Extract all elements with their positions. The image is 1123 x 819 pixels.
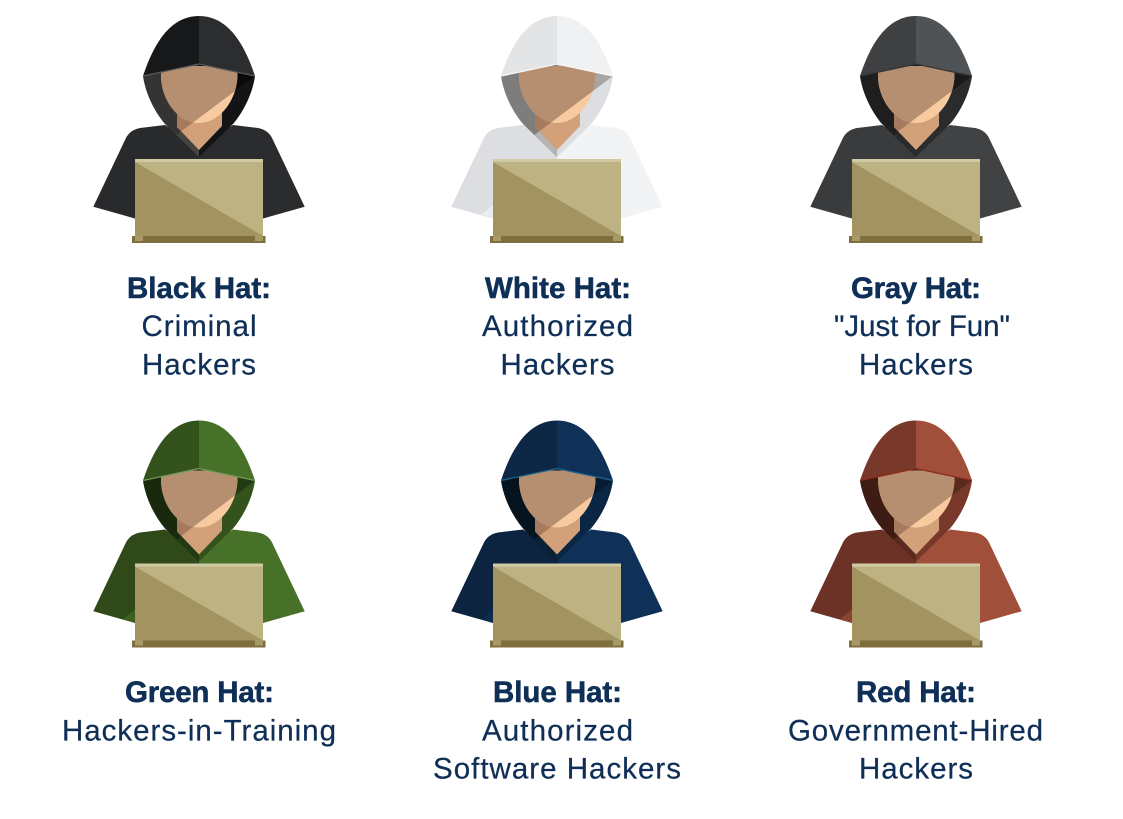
icon: red hooded hacker with laptop (810, 420, 1022, 648)
panel: gray hat (810, 16, 1022, 382)
caption: gray hat: Gray Hat: (851, 272, 981, 305)
caption: blue hat: Blue Hat: (493, 676, 622, 709)
icon: gray hooded hacker with laptop (810, 16, 1022, 243)
icon: blue hooded hacker with laptop (451, 420, 663, 648)
caption: gray hat: Hackers (859, 348, 973, 382)
caption: green hat (62, 676, 336, 748)
caption: red hat (788, 676, 1043, 786)
panel: blue hat (433, 420, 681, 786)
icon: white hooded hacker with laptop (451, 16, 663, 243)
caption: black hat: Black Hat: (127, 272, 271, 305)
panel: green hat (62, 420, 336, 748)
caption: blue hat (433, 676, 681, 786)
caption: green hat: Green Hat: (125, 676, 274, 709)
panel: white hat (451, 16, 663, 382)
icon: green hooded hacker with laptop (93, 420, 305, 648)
caption: red hat: Hackers (859, 752, 973, 786)
caption: green hat: Hackers-in-Training (62, 714, 336, 748)
caption: black hat: Hackers (142, 348, 256, 382)
panel: red hat (788, 420, 1043, 786)
caption: black hat (127, 272, 271, 382)
caption: red hat: Red Hat: (856, 676, 976, 709)
panel: black hat (93, 16, 305, 382)
caption: blue hat: Authorized (482, 714, 633, 748)
caption: black hat: Criminal (142, 310, 256, 343)
caption: red hat: Government-Hired (788, 714, 1043, 748)
caption: gray hat: "Just for Fun" (834, 310, 1010, 343)
caption: blue hat: Software Hackers (433, 752, 681, 786)
caption: white hat: Hackers (500, 348, 614, 382)
caption: white hat (482, 272, 633, 382)
caption: white hat: White Hat: (485, 272, 631, 305)
caption: gray hat (834, 272, 1010, 382)
caption: white hat: Authorized (482, 310, 633, 343)
icon: black hooded hacker with laptop (93, 16, 305, 243)
